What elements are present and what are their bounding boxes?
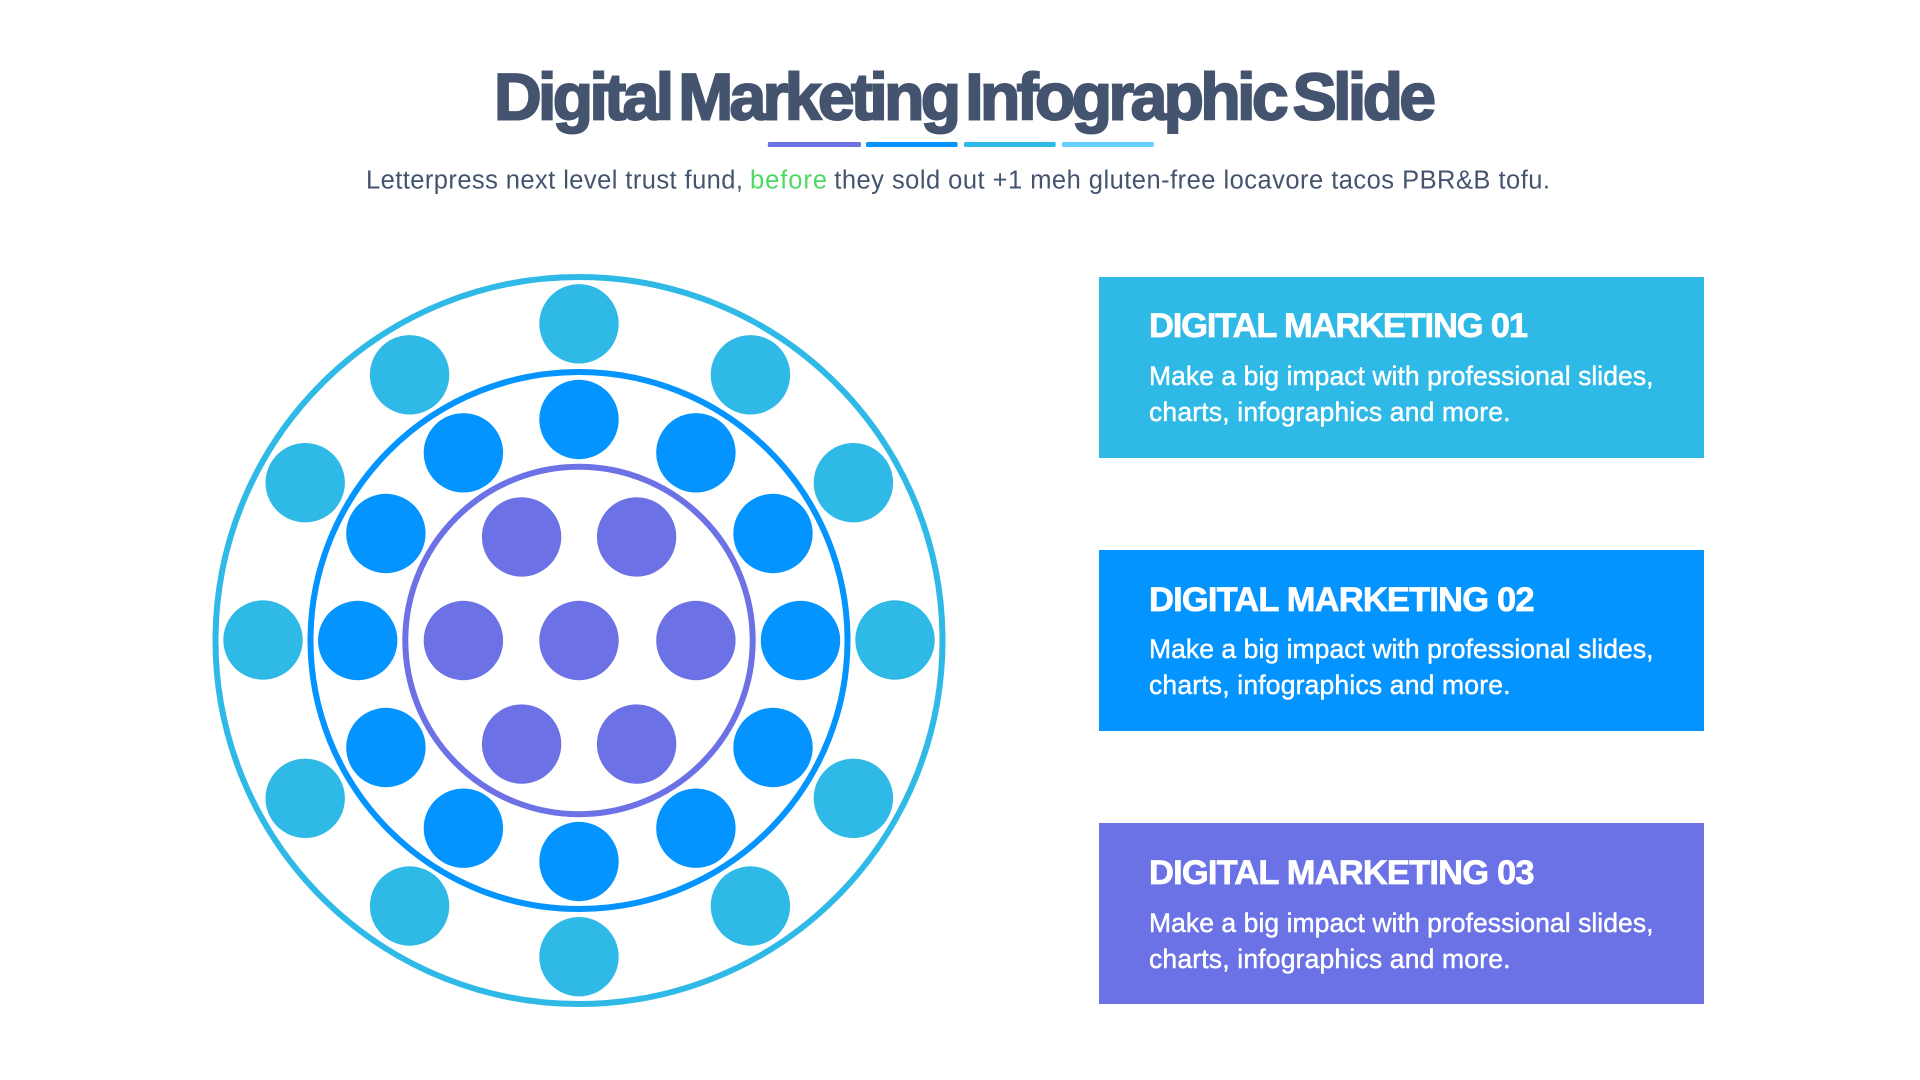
panel: digital marketing 01: charts, infographics and more. xyxy=(1149,397,1510,427)
outer ring with cyan dots xyxy=(216,277,942,1004)
subtitle xyxy=(366,166,1550,194)
panel: digital marketing 03: Make a big impact with professional slides, xyxy=(1149,908,1654,938)
panel: digital marketing 02: Make a big impact with professional slides, xyxy=(1149,634,1654,664)
middle ring with blue dots xyxy=(310,372,848,909)
panel: digital marketing 02: DIGITAL MARKETING 02 xyxy=(1149,581,1534,619)
panel: digital marketing 01: Make a big impact with professional slides, xyxy=(1149,361,1654,391)
subtitle: Letterpress next level trust fund, xyxy=(366,166,743,194)
panel: digital marketing 01: DIGITAL MARKETING 01 xyxy=(1149,307,1528,345)
panel: digital marketing 03: DIGITAL MARKETING 03 xyxy=(1149,854,1534,892)
inner ring with purple dots xyxy=(405,467,753,814)
subtitle: before xyxy=(750,166,827,194)
subtitle: they sold out +1 meh gluten-free locavore tacos PBR&B tofu. xyxy=(834,166,1550,194)
title underline bars xyxy=(768,142,1154,147)
title: Digital Marketing Infographic Slide xyxy=(494,60,1436,134)
panel: digital marketing 03: charts, infographics and more. xyxy=(1149,944,1510,974)
panel: digital marketing 02: charts, infographics and more. xyxy=(1149,670,1510,700)
concentric circle diagram xyxy=(216,277,942,1004)
panel: digital marketing 03 xyxy=(1099,823,1704,1004)
panel: digital marketing 01 xyxy=(1099,277,1704,458)
panel: digital marketing 02 xyxy=(1099,550,1704,731)
